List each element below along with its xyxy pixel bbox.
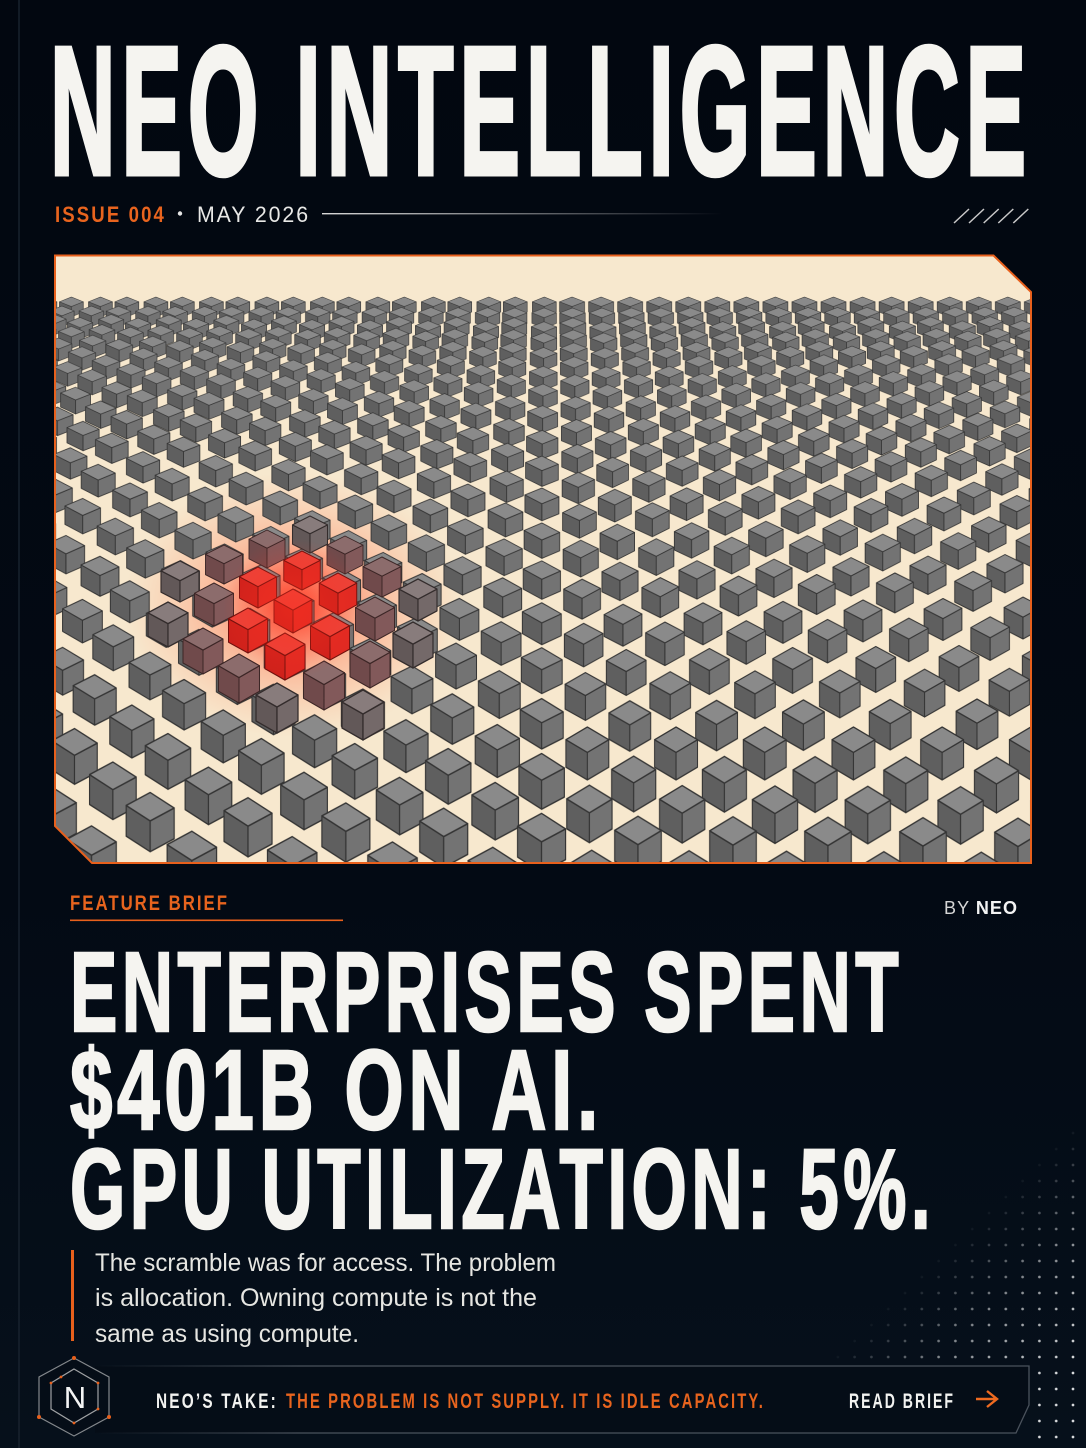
red glow on floor (141, 486, 446, 722)
rule (322, 213, 722, 214)
byline: BY NEO (944, 898, 1017, 918)
red glow over cubes (231, 544, 356, 670)
dot field decoration (837, 1132, 1074, 1438)
slash marks (954, 209, 1028, 223)
issue line (55, 202, 1028, 227)
summary paragraph (95, 1249, 556, 1348)
take bar (95, 1366, 1029, 1433)
take message: THE PROBLEM IS NOT SUPPLY. IT IS IDLE CAPACITY. (286, 1390, 765, 1413)
issue date: MAY 2026 (197, 202, 310, 227)
icon: N hexagon logo: N (64, 1380, 86, 1415)
cube grid (0, 296, 1086, 915)
feature brief label: FEATURE BRIEF (70, 892, 229, 915)
arrow icon (976, 1391, 997, 1407)
read brief link: READ BRIEF (849, 1390, 955, 1413)
summary paragraph: same as using compute. (95, 1320, 359, 1348)
active GPU cluster: red cubes (228, 551, 357, 680)
idle GPU ring: tinted cubes (148, 516, 437, 740)
headline: $401B ON AI. (70, 1027, 603, 1153)
issue number: ISSUE 004 (55, 202, 166, 227)
accent bar (71, 1250, 74, 1341)
panel: cube field illustration (54, 254, 1032, 864)
separator dot (178, 211, 182, 216)
panel border (55, 256, 1031, 863)
summary paragraph: The scramble was for access. The problem (95, 1249, 556, 1277)
icon: N hexagon logo (37, 1356, 111, 1436)
headline (70, 929, 935, 1252)
take label: NEO’S TAKE: (156, 1390, 278, 1413)
summary paragraph: is allocation. Owning compute is not the (95, 1284, 537, 1312)
